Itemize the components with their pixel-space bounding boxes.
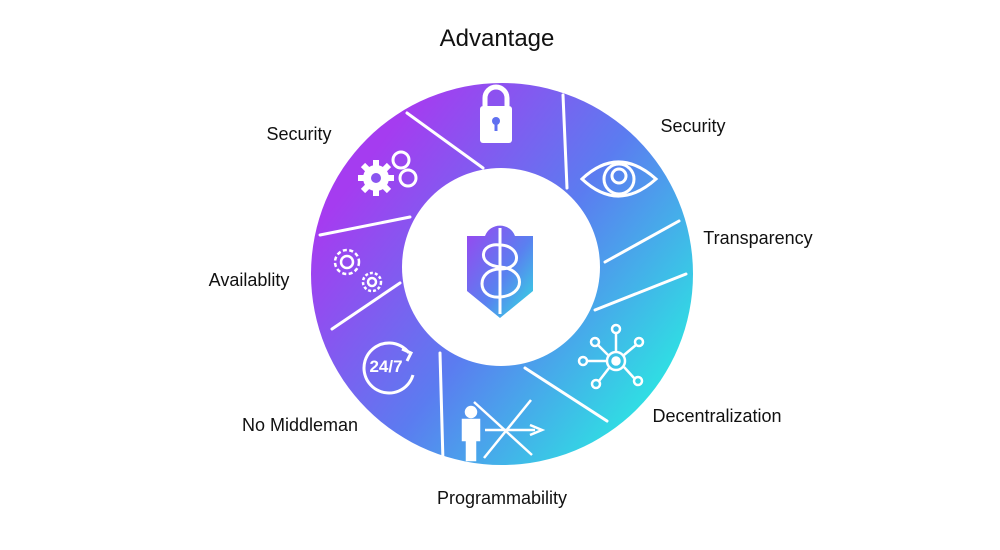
- icon: 24/7: 24/7: [369, 357, 403, 376]
- icon: eye: [582, 162, 656, 196]
- icon: lock: [480, 87, 512, 143]
- label: security right: Security: [660, 116, 726, 136]
- icon: 24/7: [364, 343, 413, 393]
- label: security left: Security: [266, 124, 332, 144]
- icon: gears: [358, 152, 416, 196]
- icon: network: [579, 325, 643, 388]
- title: Advantage: [440, 25, 554, 52]
- label: availability: Availablity: [209, 270, 289, 290]
- icon: no middleman: [463, 400, 542, 460]
- label: no middleman: No Middleman: [242, 415, 358, 435]
- label: transparency: Transparency: [703, 228, 813, 248]
- label: programmability: Programmability: [437, 488, 567, 508]
- icon: small gears: [335, 250, 381, 291]
- ring: [311, 83, 693, 465]
- label: decentralization: Decentralization: [652, 406, 782, 426]
- icon: center shield: [467, 226, 533, 318]
